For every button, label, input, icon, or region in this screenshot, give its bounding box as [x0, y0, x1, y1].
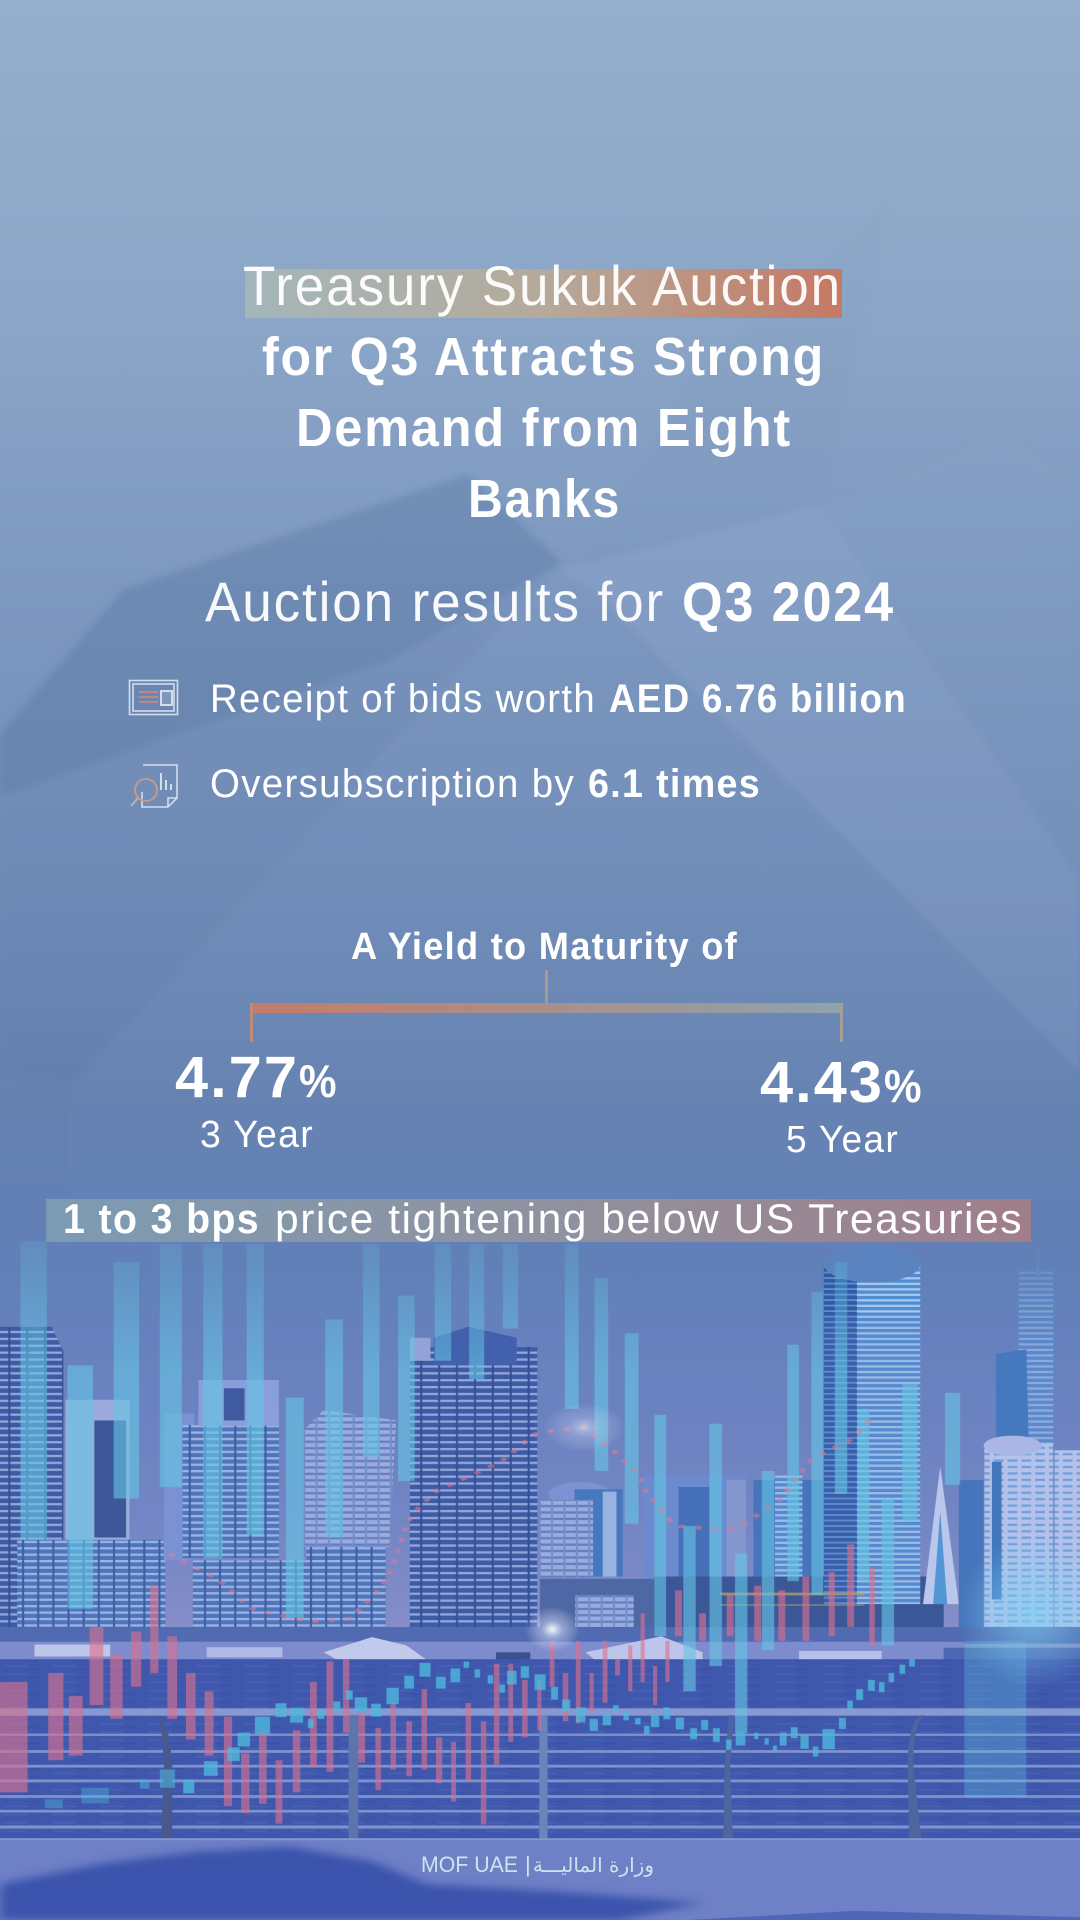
3 year yield: 4.77 [175, 1045, 299, 1110]
yield heading: A Yield to Maturity of [351, 926, 738, 968]
cyan glow at right side [957, 1535, 1080, 1691]
main buildings [0, 1246, 1080, 1643]
5 year yield: 4.43 [760, 1050, 884, 1115]
title highlight bar [245, 269, 842, 318]
subtitle: Q3 2024 [682, 570, 895, 633]
price tightening callout: price tightening below US Treasuries [275, 1195, 1023, 1242]
city skyline scene [0, 1241, 1080, 1920]
title [243, 254, 842, 529]
title line 4: Banks [468, 469, 621, 529]
red dotted trend line [169, 1420, 871, 1622]
light flares [525, 1402, 625, 1652]
bids text: Receipt of bids worth [210, 677, 596, 721]
subtitle: Auction results for [205, 570, 665, 633]
water [0, 1659, 1080, 1839]
3 year yield [175, 1045, 338, 1156]
title line 3: Demand from Eight [296, 398, 792, 458]
red candlesticks [0, 1544, 875, 1825]
background towers [548, 1272, 1054, 1579]
oversubscription text: 6.1 times [588, 762, 761, 806]
title line 2: for Q3 Attracts Strong [262, 327, 825, 387]
cyan candlesticks [21, 1241, 1026, 1797]
railing [0, 1708, 1080, 1842]
tree line and marina boats [0, 1627, 1080, 1671]
bids text: AED 6.76 billion [609, 677, 907, 721]
sky behind skyline [0, 1244, 1080, 1657]
3 year yield: 3 Year [200, 1114, 314, 1156]
5 year yield: 5 Year [786, 1119, 899, 1161]
teal trend line candles [45, 1659, 915, 1808]
yield bracket [250, 970, 843, 1042]
footer handle: MOF UAE [421, 1852, 518, 1877]
footer handle [421, 1852, 654, 1877]
footer handle: وزارة الماليـــة [533, 1853, 654, 1877]
price tightening callout: 1 to 3 bps [63, 1195, 260, 1242]
footer handle: | [525, 1852, 531, 1877]
5 year yield: % [884, 1060, 923, 1112]
icon: document with magnifier [131, 765, 177, 807]
5 year yield [760, 1050, 923, 1161]
title line 1: Treasury Sukuk Auction [243, 254, 842, 317]
icon: certificate [130, 680, 178, 714]
3 year yield: % [299, 1055, 338, 1107]
wash over skyline [0, 1315, 1080, 1659]
oversubscription text [210, 762, 761, 806]
bids text [210, 677, 907, 721]
promenade ground [0, 1838, 1080, 1920]
oversubscription text: Oversubscription by [210, 762, 575, 806]
background facets [0, 207, 1080, 1200]
